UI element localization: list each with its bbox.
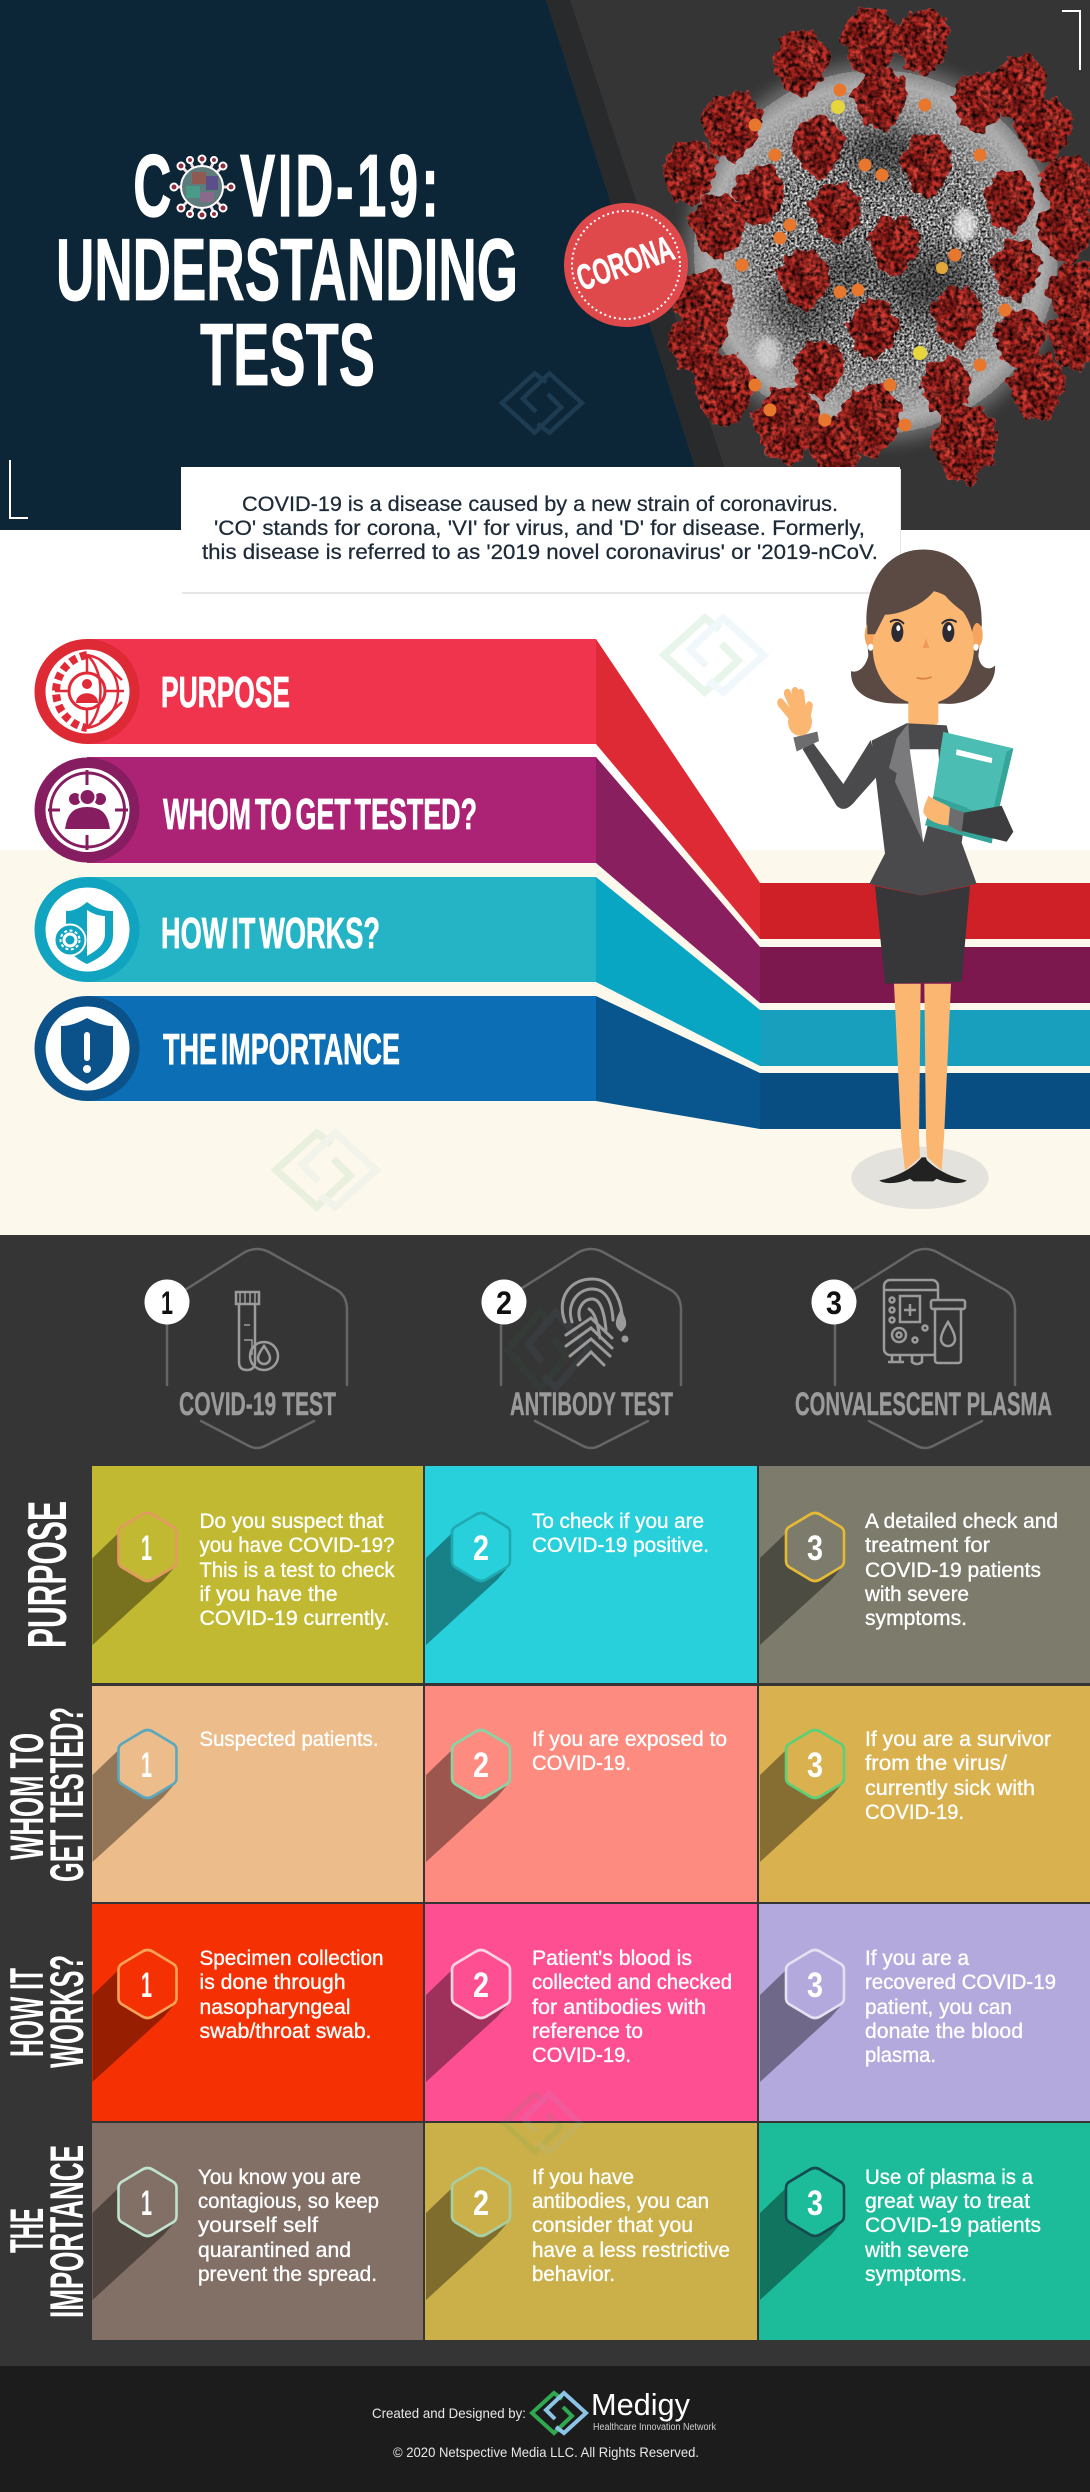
cell: importance, test 1 (92, 2123, 423, 2340)
icon: shield with exclamation (61, 1018, 113, 1084)
menu bar: how it works (34, 877, 1090, 1066)
intro text box: COVID-19 is a disease caused by a new strain of coronavirus. (242, 493, 838, 516)
cell: whom, test 1 (92, 1686, 423, 1902)
cell text: symptoms. (865, 1607, 967, 1630)
tests section background (0, 1235, 1090, 2366)
cell text: plasma. (865, 2044, 936, 2067)
cell text: from the virus/ (865, 1752, 1007, 1775)
cell text: currently sick with (865, 1777, 1035, 1800)
cell text: COVID-19 currently. (200, 1607, 390, 1630)
cell text: have a less restrictive (532, 2239, 730, 2262)
footer (0, 2366, 1090, 2492)
row label: how it works: HOW IT (0, 1968, 53, 2057)
cell text: COVID-19 patients (865, 2214, 1041, 2237)
cell text: COVID-19 positive. (532, 1534, 709, 1557)
icon: test tube (236, 1292, 278, 1370)
cell text: COVID-19. (532, 1752, 631, 1775)
cell text (865, 1947, 1056, 2067)
copyright: © 2020 Netspective Media LLC. All Rights Reserved. (393, 2444, 699, 2460)
row label: whom to get tested: GET TESTED? (40, 1707, 93, 1882)
test header 2: antibody test (482, 1249, 681, 1448)
row label: the importance: THE (0, 2208, 53, 2253)
test header 3: convalescent plasma: 3 (826, 1285, 842, 1321)
row label: purpose: PURPOSE (16, 1501, 78, 1648)
badge 2 (452, 2168, 510, 2236)
cell text: Suspected patients. (200, 1728, 378, 1751)
label: WHOM TO GET TESTED? (163, 790, 477, 839)
row label: whom to get tested (0, 1707, 93, 1882)
backgrounds of the menu section (0, 530, 1090, 1235)
cell: how, test 2 (425, 1904, 757, 2121)
cell text: Do you suspect that (200, 1510, 384, 1533)
cell text: you have COVID-19? (200, 1534, 394, 1557)
row label: the importance: IMPORTANCE (40, 2145, 93, 2318)
badge 1: 1 (141, 2184, 152, 2223)
label: THE IMPORTANCE (163, 1025, 400, 1074)
cell text: nasopharyngeal (200, 1996, 350, 2019)
cell: importance, test 2 (425, 2123, 757, 2340)
credit text: Created and Designed by: (372, 2405, 526, 2421)
badge 3: 3 (807, 1529, 823, 1568)
corner bracket top right (1062, 11, 1080, 70)
test header 1: covid-19 test (144, 1249, 347, 1448)
badge 3: 3 (807, 2184, 823, 2223)
cell: purpose, test 3 (759, 1466, 1090, 1683)
badge 2: 2 (473, 1529, 489, 1568)
cell text: swab/throat swab. (200, 2020, 372, 2043)
cell text (532, 1728, 727, 1775)
cell: how, test 1 (92, 1904, 423, 2121)
watermark logo over grid (504, 2094, 580, 2152)
cell text: if you have the (200, 1583, 338, 1606)
badge 3 (786, 1513, 844, 1581)
badge 3: 3 (807, 1966, 823, 2005)
corona stamp: CORONA (571, 227, 679, 299)
row label: how it works (0, 1955, 93, 2068)
woman illustration (781, 550, 1013, 1209)
row label: the importance (0, 2145, 93, 2318)
badge 1: 1 (141, 1746, 152, 1785)
cell: whom, test 2 (425, 1686, 757, 1902)
icon: group in crosshair (48, 770, 128, 850)
cell text (532, 1947, 732, 2067)
intro text box (181, 467, 901, 594)
row label: whom to get tested: WHOM TO (0, 1733, 53, 1860)
icon: shield with gear (54, 902, 113, 964)
cell text: behavior. (532, 2263, 615, 2286)
title: COVID-19: (133, 137, 439, 235)
badge 1 (118, 2168, 176, 2236)
cell text: is done through (200, 1971, 346, 1994)
cell text: prevent the spread. (198, 2263, 377, 2286)
intro text box: 'CO' stands for corona, 'VI' for virus, and 'D' for disease. Formerly, (214, 517, 865, 540)
cell text: Specimen collection (200, 1947, 384, 1970)
cell text: If you are a survivor (865, 1728, 1051, 1751)
cell text: reference to (532, 2020, 643, 2043)
icon: gear and globe (55, 655, 124, 728)
cell text: If you are a (865, 1947, 969, 1970)
cell: importance, test 3 (759, 2123, 1090, 2340)
badge 3 (786, 2168, 844, 2236)
cell text (532, 2166, 730, 2286)
medigy wordmark (591, 2387, 717, 2433)
cell text: great way to treat (865, 2190, 1030, 2213)
coronavirus illustration (659, 8, 1090, 486)
cell text: donate the blood (865, 2020, 1023, 2043)
cell text: If you are exposed to (532, 1728, 727, 1751)
badge 3 (786, 1730, 844, 1798)
icon: plasma machine and bottle (884, 1280, 965, 1364)
cell: purpose, test 2 (425, 1466, 757, 1683)
cell text: consider that you (532, 2214, 693, 2237)
cell text (200, 1947, 384, 2043)
test header 1: covid-19 test: 1 (161, 1285, 173, 1321)
title (56, 137, 518, 404)
cell text: yourself self (198, 2214, 318, 2237)
badge 2: 2 (473, 1966, 489, 2005)
badge 1 (118, 1730, 176, 1798)
dark diagonal band (546, 0, 1090, 530)
cell text: patient, you can (865, 1996, 1012, 2019)
cell text: To check if you are (532, 1510, 704, 1533)
cell text: with severe (864, 1583, 969, 1606)
title: UNDERSTANDING (56, 220, 518, 319)
badge 1: 1 (141, 1966, 152, 2005)
menu bar: purpose (34, 639, 1090, 939)
watermark logo lower (276, 1133, 376, 1207)
watermark logo upper (664, 618, 764, 692)
badge 2 (452, 1730, 510, 1798)
cell text: Patient's blood is (532, 1947, 692, 1970)
cell text: for antibodies with (532, 1996, 706, 2019)
badge 2: 2 (473, 2184, 489, 2223)
menu bar: the importance (34, 996, 1090, 1129)
cell text (864, 2166, 1041, 2286)
label: PURPOSE (161, 668, 290, 717)
label: HOW IT WORKS? (161, 909, 380, 958)
cell text: contagious, so keep (198, 2190, 379, 2213)
badge 1: 1 (141, 1529, 152, 1568)
corona stamp (564, 203, 688, 327)
corner bracket bottom left (10, 460, 28, 518)
cell text (864, 1510, 1058, 1630)
cell text: with severe (864, 2239, 969, 2262)
watermark logo in tests section (508, 1312, 588, 1388)
cell text: COVID-19. (532, 2044, 631, 2067)
cell text: symptoms. (865, 2263, 967, 2286)
cell text (198, 2166, 379, 2286)
row label: how it works: WORKS? (40, 1955, 93, 2068)
cell: purpose, test 1 (92, 1466, 423, 1683)
watermark logo (502, 373, 582, 433)
cell text: Use of plasma is a (865, 2166, 1033, 2189)
cell: how, test 3 (759, 1904, 1090, 2121)
cell text: collected and checked (532, 1971, 732, 1994)
cell text: A detailed check and (865, 1510, 1058, 1533)
medigy wordmark: Healthcare Innovation Network (593, 2422, 717, 2433)
cell text: If you have (532, 2166, 634, 2189)
badge 2 (452, 1513, 510, 1581)
test header 2: antibody test: 2 (496, 1285, 512, 1321)
intro text box: this disease is referred to as '2019 novel coronavirus' or '2019-nCoV. (202, 541, 878, 564)
label: ANTIBODY TEST (510, 1386, 673, 1422)
title: TESTS (200, 305, 375, 404)
badge 3 (786, 1950, 844, 2018)
medigy logo (532, 2393, 586, 2433)
badge 2: 2 (473, 1746, 489, 1785)
menu bar: whom to get tested (34, 757, 1090, 1003)
cell: whom, test 3 (759, 1686, 1090, 1902)
cell text: COVID-19 patients (865, 1559, 1041, 1582)
medigy wordmark: Medigy (591, 2387, 690, 2422)
badge 3: 3 (807, 1746, 823, 1785)
cell text (200, 1510, 395, 1630)
icon: fingerprint (562, 1279, 627, 1365)
badge 1 (118, 1950, 176, 2018)
cell text: You know you are (198, 2166, 361, 2189)
cell text: antibodies, you can (532, 2190, 709, 2213)
hero section (0, 0, 1090, 530)
cell text: recovered COVID-19 (865, 1971, 1056, 1994)
icon: virus as letter O (170, 152, 234, 220)
label: COVID-19 TEST (179, 1386, 336, 1422)
cell text (865, 1728, 1051, 1824)
cell text (532, 1510, 709, 1557)
cell text: quarantined and (198, 2239, 351, 2262)
cell text: COVID-19. (865, 1801, 964, 1824)
cell text: treatment for (865, 1534, 990, 1557)
cell text: This is a test to check (200, 1559, 395, 1582)
test header 3: convalescent plasma (795, 1249, 1052, 1448)
badge 2 (452, 1950, 510, 2018)
badge 1 (118, 1513, 176, 1581)
